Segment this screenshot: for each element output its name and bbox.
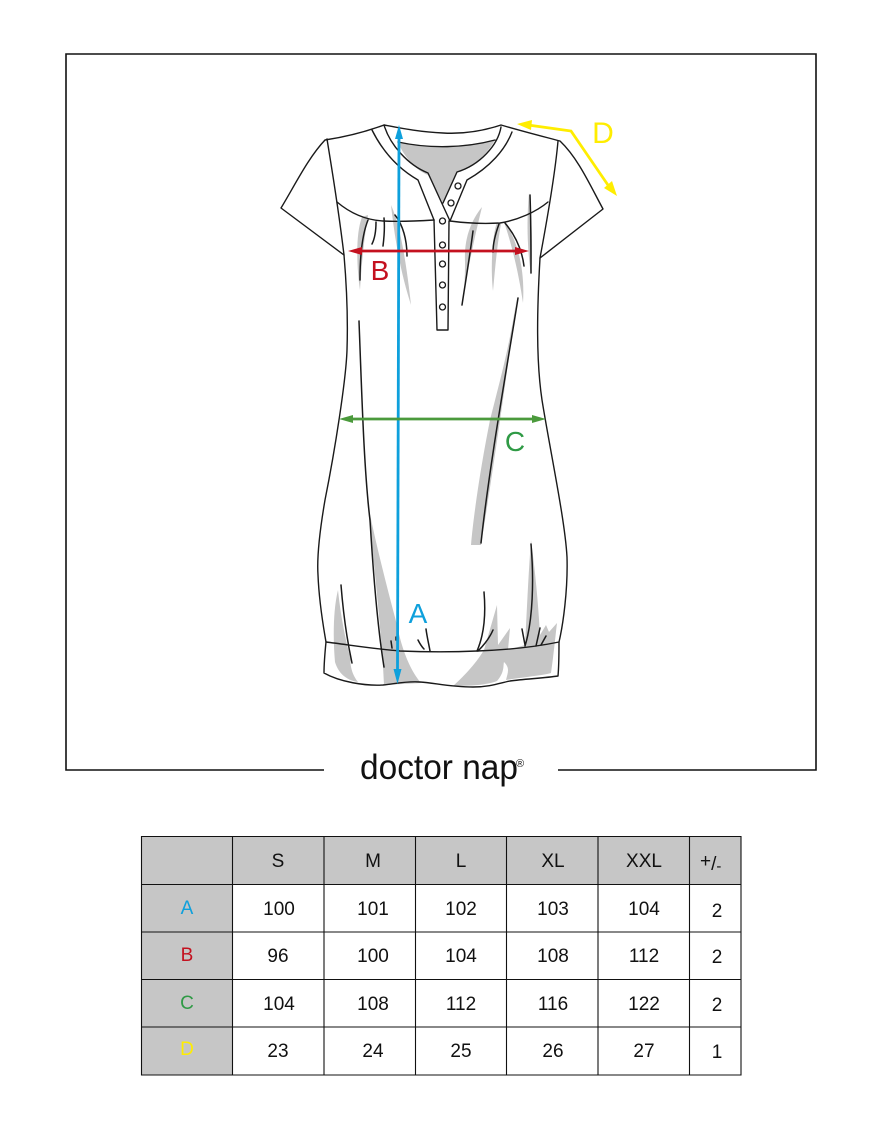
row B: 112 (629, 946, 659, 967)
row B: 100 (357, 946, 389, 967)
table header row: - (716, 858, 721, 875)
hem band seam (326, 642, 559, 652)
table header row: XXL (626, 851, 662, 872)
row A: A (181, 898, 194, 919)
row B: 108 (537, 946, 569, 967)
row D: 23 (267, 1041, 289, 1062)
brand logo: ® (516, 758, 524, 770)
arrow D: shoulder width: D (592, 117, 614, 150)
table header row: S (272, 851, 284, 872)
table grid (141, 836, 741, 1075)
row B: 104 (445, 946, 477, 967)
arrow C: waist width (339, 415, 546, 457)
yoke seam (337, 202, 548, 223)
arrow B: bust width (348, 247, 529, 286)
row A: 102 (445, 899, 477, 920)
arrow A: total length (394, 125, 428, 684)
row D: 24 (362, 1041, 384, 1062)
row C: 104 (263, 994, 295, 1015)
row B: 2 (712, 947, 722, 968)
row D: D (180, 1039, 194, 1060)
arrow D: shoulder width (517, 117, 617, 196)
arrow B: bust width: B (371, 255, 389, 286)
table header shading (141, 836, 741, 1075)
row C: 122 (628, 994, 660, 1015)
sleeve seams (327, 139, 558, 258)
row A: 101 (357, 899, 389, 920)
table header row: + (700, 851, 711, 872)
row A: 100 (263, 899, 295, 920)
row C: 108 (357, 994, 389, 1015)
dress outline (281, 125, 603, 687)
row A: 104 (628, 899, 660, 920)
table header row: M (365, 851, 381, 872)
brand logo: doctor nap (360, 748, 518, 787)
illustration: dress technical drawing (281, 125, 603, 687)
table header row: XL (541, 851, 565, 872)
button placket (434, 220, 449, 330)
row C: 116 (538, 994, 568, 1015)
frame: product illustration border (66, 54, 816, 770)
row C: C (180, 993, 194, 1014)
arrow C: waist width: C (505, 426, 525, 457)
table header row (272, 851, 721, 875)
row D: 27 (633, 1041, 655, 1062)
dress fold shading (334, 140, 557, 686)
row D: 26 (542, 1041, 564, 1062)
row D: 25 (450, 1041, 472, 1062)
row D (180, 1039, 722, 1063)
row B: B (181, 945, 193, 966)
arrow A: total length: A (409, 598, 428, 629)
row B: 96 (267, 946, 289, 967)
row B (181, 945, 722, 968)
row C (180, 993, 722, 1016)
row C: 2 (712, 995, 722, 1016)
buttons (440, 183, 461, 310)
row A (181, 898, 722, 922)
table header row: / (711, 854, 717, 875)
table header row: L (456, 851, 466, 872)
row C: 112 (446, 994, 476, 1015)
row A: 2 (712, 901, 722, 922)
size table (141, 836, 741, 1075)
row D: 1 (712, 1042, 722, 1063)
collar (372, 125, 512, 221)
fold lines (341, 195, 546, 667)
row A: 103 (537, 899, 569, 920)
